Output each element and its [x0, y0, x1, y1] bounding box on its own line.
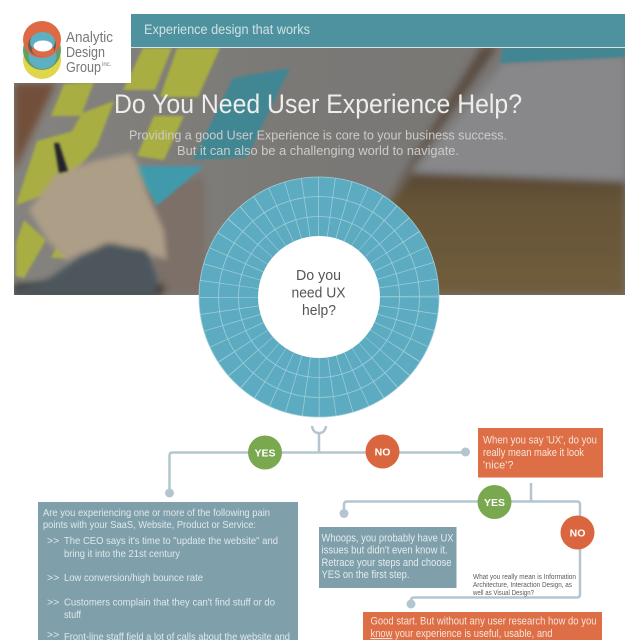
- panel: make it nice question: really mean make it look: [483, 447, 584, 459]
- hero photo background: [14, 46, 625, 295]
- wheel question: need UX: [292, 284, 346, 302]
- panel: whoops: [319, 527, 456, 588]
- note: what you really mean: well as Visual Design?: [472, 590, 534, 597]
- panel: good start: [363, 612, 602, 640]
- panel: pain points: >>: [47, 596, 59, 608]
- yes badge: YES: [254, 448, 276, 460]
- panel: pain points: Customers complain that they can't find stuff or do: [64, 596, 275, 608]
- subtitle: Providing a good User Experience is core to your business success.: [129, 128, 507, 142]
- panel: good start: Good start. But without any user research how do you: [370, 616, 596, 628]
- wheel question: [292, 267, 346, 319]
- panel: pain points: Low conversion/high bounce rate: [64, 572, 203, 584]
- logo: inc.: [102, 62, 112, 68]
- second no badge: NO: [570, 528, 585, 540]
- yes badge: [248, 436, 282, 470]
- second yes badge: YES: [484, 497, 505, 509]
- panel: make it nice question: 'nice'?: [483, 460, 514, 472]
- panel: good start: know your experience is useful, usable, and: [370, 628, 552, 640]
- title: Do You Need User Experience Help?: [114, 89, 522, 119]
- subtitle: [129, 128, 507, 158]
- wheel question: help?: [302, 302, 336, 319]
- panel: pain points: >>: [47, 535, 59, 547]
- no badge: [366, 434, 400, 468]
- header band: [131, 14, 625, 48]
- logo: Analytic: [66, 30, 113, 46]
- panel: make it nice question: [478, 428, 603, 478]
- central wheel: [199, 177, 439, 417]
- wheel question: Do you: [296, 267, 341, 284]
- note: what you really mean: What you really mean is Information: [473, 574, 576, 581]
- panel: make it nice question: When you say 'UX', do you: [483, 434, 597, 446]
- subtitle: But it can also be a challenging world to navigate.: [177, 143, 459, 158]
- panel: pain points: bring it into the 21st century: [64, 548, 181, 560]
- logo: [14, 14, 131, 83]
- panel: pain points: stuff: [64, 609, 81, 621]
- logo: Group: [66, 60, 101, 76]
- note: what you really mean: Architecture, Interaction Design, as: [473, 582, 572, 589]
- panel: pain points: >>: [47, 572, 59, 584]
- panel: whoops: issues but didn't even know it.: [322, 544, 448, 556]
- panel: pain points: Are you experiencing one or more of the following pain: [43, 507, 270, 519]
- panel: whoops: YES on the first step.: [322, 569, 410, 581]
- panel: whoops: Whoops, you probably have UX: [322, 532, 454, 544]
- second no badge: [560, 516, 594, 550]
- no badge: NO: [375, 446, 390, 458]
- panel: pain points: points with your SaaS, Website, Product or Service:: [43, 519, 256, 531]
- tagline: Experience design that works: [144, 22, 310, 37]
- note: what you really mean: [472, 574, 576, 597]
- flow connectors: [170, 426, 580, 604]
- panel: pain points: The CEO says it's time to "update the website" and: [64, 535, 278, 547]
- second yes badge: [478, 485, 512, 519]
- logo: Design: [66, 45, 105, 61]
- panel: pain points: [38, 502, 298, 640]
- connector dots: [165, 448, 470, 608]
- panel: whoops: Retrace your steps and choose: [322, 557, 452, 569]
